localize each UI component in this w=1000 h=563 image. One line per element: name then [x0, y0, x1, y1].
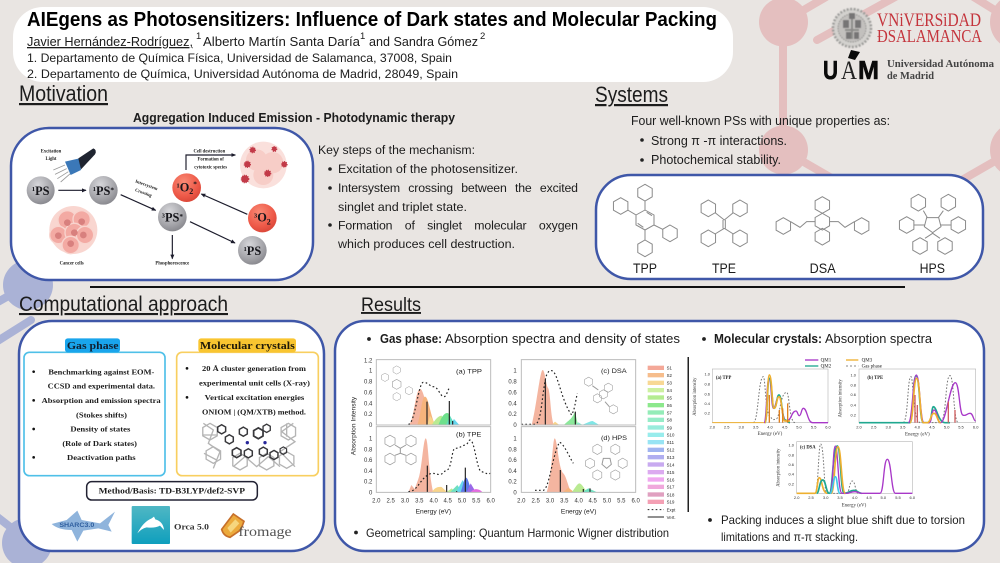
- axis ticks: 0.4: [508, 469, 517, 475]
- axis ticks: 0.2: [364, 412, 373, 418]
- authors: Alberto Martín Santa Daría: [203, 34, 361, 49]
- legend: S8: [667, 418, 673, 423]
- label: cancer cells: Cancer cells: [60, 261, 84, 266]
- label: intersystem crossing: [134, 179, 158, 199]
- title block: [13, 7, 733, 82]
- list: gas phase: Deactivation paths: [67, 454, 136, 462]
- axis ticks: 1: [369, 369, 373, 375]
- panel c: DSA crystal: [797, 442, 912, 493]
- logo: SHARC: SHARC3.0: [59, 522, 95, 529]
- axis ticks: 0.8: [508, 380, 517, 386]
- species: 1PS ground: [238, 236, 267, 265]
- species: 3PS*: PS: [165, 211, 179, 225]
- species: 1PS: 1: [32, 186, 35, 193]
- legend: S10: [667, 433, 675, 438]
- panel: mechanism diagram: [11, 128, 313, 280]
- species: 1PS ground: 1: [243, 246, 247, 253]
- list: crystals: experimental unit cells (X-ray): [199, 380, 311, 388]
- card: molecular crystals: Molecular crystals: [200, 341, 295, 352]
- axis ticks: 0: [513, 423, 517, 429]
- chart ticks and axis labels: 3.5: [900, 424, 906, 429]
- axis ticks: 3.0: [401, 498, 410, 504]
- chart ticks and axis labels: 0.8: [704, 382, 711, 387]
- chart ticks and axis labels: 3.5: [837, 495, 844, 500]
- text block: key steps: Formation of singlet molecular oxygen: [338, 218, 578, 232]
- chart ticks and axis labels: 0.4: [850, 402, 857, 407]
- heading: crystal results: [702, 332, 932, 346]
- axis ticks: 0.2: [508, 412, 517, 418]
- chart ticks and axis labels: 0.2: [788, 481, 795, 486]
- chart ticks and axis labels: 2.0: [794, 495, 800, 500]
- title: AIEgens as Photosensitizers: Influence of Dark states and Molecular Packing: [27, 9, 717, 31]
- panel a: TPP crystal: [712, 369, 828, 423]
- axis ticks: 4.5: [589, 498, 597, 504]
- label: intersystem crossing: Crossing: [134, 188, 153, 199]
- icon: destroyed cells: [240, 142, 287, 188]
- legend: [648, 366, 676, 520]
- heading: Systems: Systems: [595, 82, 668, 107]
- labels: system names: TPP: [633, 260, 657, 276]
- text block: key steps: [318, 143, 578, 251]
- panel d: HPS: [535, 435, 627, 492]
- axis ticks: 3.5: [560, 498, 569, 504]
- chart ticks and axis labels: 5.5: [958, 424, 965, 429]
- label: Orca 5.0: Orca 5.0: [174, 522, 209, 531]
- species: 1PS ground: PS: [247, 244, 261, 258]
- authors: [27, 31, 485, 49]
- panel b: TPE: (b) TPE: [456, 432, 481, 439]
- chart ticks and axis labels: 4.0: [767, 424, 774, 429]
- axis ticks: 0: [369, 423, 373, 429]
- axis ticks: 2.5: [532, 498, 540, 504]
- axis ticks: 1: [513, 437, 517, 443]
- decorative blue molecule: [0, 260, 53, 563]
- authors: and Sandra Gómez: [369, 34, 478, 49]
- chart ticks and axis labels: 5.0: [881, 495, 887, 500]
- text block: key steps: which produces cell destruction.: [337, 237, 515, 251]
- legend: S14: [667, 462, 675, 467]
- species: 1O2*: 2: [189, 187, 193, 196]
- species: 1O2*: *: [193, 180, 197, 189]
- legend: S4: [667, 388, 673, 393]
- legend: S15: [667, 470, 675, 475]
- axis ticks: 6.0: [631, 498, 640, 504]
- species: 1PS: [27, 176, 55, 204]
- species: 3PS*: *: [179, 212, 183, 221]
- axis ticks: 0.4: [508, 401, 517, 407]
- species: 3PS*: [158, 203, 187, 231]
- chart ticks and axis labels: Energy (eV): [758, 432, 783, 437]
- legend: S17: [667, 485, 675, 490]
- heading: crystal results: Molecular crystals:: [714, 332, 822, 346]
- list: gas phase: (Role of Dark states): [62, 440, 138, 448]
- heading: Results: Results: [361, 295, 421, 316]
- molecule: DSA: [776, 197, 869, 245]
- axis ticks: 0.2: [508, 480, 517, 486]
- axis ticks: 5.0: [603, 498, 612, 504]
- logo: UAM: A: [841, 56, 857, 85]
- panel b: TPE crystal: [859, 369, 976, 423]
- chart ticks and axis labels: 2.5: [808, 495, 815, 500]
- chart ticks and axis labels: Absorption intensity: [839, 379, 844, 417]
- list: crystals: 20 Å cluster generation from: [202, 365, 306, 373]
- label: cell destruction: Cell destruction: [193, 150, 226, 155]
- list: gas phase: Density of states: [70, 426, 131, 434]
- label: intersystem crossing: Intersystem: [134, 179, 158, 192]
- axis ticks: 0: [369, 490, 373, 496]
- legend: S19: [667, 500, 675, 505]
- chart ticks and axis labels: 4.5: [782, 424, 788, 429]
- species: 1O2*: 1: [176, 182, 180, 189]
- logo: Orca: [132, 506, 170, 544]
- label: cell destruction: [193, 150, 227, 171]
- axis ticks: 2.0: [517, 498, 526, 504]
- axis ticks: 3.5: [415, 498, 424, 504]
- chart ticks and axis labels: 2.5: [724, 424, 730, 429]
- axis ticks: 0.6: [508, 458, 517, 464]
- chart ticks and axis labels: 5.0: [944, 424, 950, 429]
- molecule: HPS: [899, 194, 966, 254]
- logo: SHARC: [52, 511, 115, 542]
- panel c: DSA: [521, 368, 628, 425]
- axis ticks: [364, 359, 640, 504]
- chart ticks and axis labels: 0.4: [788, 472, 795, 477]
- icon: cancer cells: [49, 206, 97, 254]
- logo: UAM: de Madrid: [887, 71, 934, 82]
- species: 1O2*: [172, 173, 201, 202]
- axis titles: Energy (eV): [416, 508, 451, 515]
- label: cell destruction: Formation of: [198, 158, 224, 163]
- list: gas phase: (Stokes shifts): [76, 411, 128, 419]
- species: 1PS*: PS: [96, 184, 110, 198]
- panel: systems: [596, 175, 983, 279]
- list: gas phase: Benchmarking against EOM-: [48, 368, 155, 376]
- labels: system names: TPE: [712, 260, 736, 276]
- panel c: DSA crystal: (c) DSA: [800, 446, 816, 451]
- axis ticks: 0.2: [364, 480, 373, 486]
- legend: S1: [667, 366, 673, 371]
- axis ticks: 0.8: [364, 380, 373, 386]
- card: molecular crystals: [177, 338, 318, 476]
- card: gas phase: [24, 338, 165, 476]
- chart ticks and axis labels: 2.0: [710, 424, 716, 429]
- label: excitation light: Light: [46, 157, 57, 162]
- chart ticks and axis labels: 0.8: [788, 453, 795, 458]
- axis ticks: 2.0: [372, 498, 381, 504]
- axis ticks: 5.5: [472, 498, 481, 504]
- chart ticks and axis labels: 4.0: [852, 495, 858, 500]
- axis ticks: 0.8: [508, 447, 517, 453]
- logo: UAM: U: [823, 55, 838, 85]
- method box: [87, 482, 257, 500]
- axis ticks: 5.5: [617, 498, 626, 504]
- axis ticks: 4.0: [430, 498, 438, 504]
- heading: crystal results: Absorption spectra: [825, 332, 932, 346]
- species: 3O2: 3: [254, 213, 258, 220]
- species: 1PS: PS: [35, 184, 50, 198]
- molecule: TPP: [613, 184, 677, 257]
- text block: key steps: Intersystem crossing between the excited: [338, 181, 578, 195]
- axis ticks: 0.4: [364, 469, 373, 475]
- logo: UAM: [823, 50, 995, 85]
- chart ticks and axis labels: 0.8: [850, 383, 857, 388]
- chart ticks and axis labels: 4.0: [915, 424, 921, 429]
- method box: Method/Basis: TD-B3LYP/def2-SVP: [99, 487, 245, 496]
- image: crystal cluster: [203, 423, 296, 470]
- chart ticks and axis labels: 2.0: [856, 424, 863, 429]
- chart legend: [805, 359, 883, 370]
- authors: 1: [196, 31, 201, 42]
- chart ticks and axis labels: Absorption intensity: [693, 377, 698, 416]
- chart ticks and axis labels: 3.0: [823, 495, 829, 500]
- legend: Expt: [667, 508, 676, 513]
- axis ticks: 6.0: [487, 498, 495, 504]
- chart ticks and axis labels: 4.5: [929, 424, 936, 429]
- chart: crystal absorption spectra: [693, 359, 979, 508]
- axis titles: Absorption Intensity: [351, 396, 358, 455]
- axis ticks: 5.0: [458, 498, 467, 504]
- affiliations: [27, 51, 458, 81]
- affiliations: 2. Departamento de Química, Universidad Autónoma de Madrid, 28049, Spain: [27, 67, 458, 81]
- axis ticks: 0.6: [508, 390, 517, 396]
- species: 3O2: 2: [267, 217, 271, 226]
- panel b: TPE crystal: (b) TPE: [867, 376, 883, 381]
- chart ticks and axis labels: 3.0: [739, 424, 745, 429]
- chart ticks and axis labels: Energy (eV): [842, 503, 867, 508]
- chart ticks and axis labels: 0.6: [704, 391, 711, 396]
- chart ticks and axis labels: 0.6: [850, 392, 857, 397]
- axis ticks: 1: [369, 437, 373, 443]
- label: excitation light: [41, 149, 62, 162]
- list: gas phase: CCSD and experimental data.: [48, 383, 155, 391]
- axis ticks: 4.5: [444, 498, 452, 504]
- panel a: TPP: [381, 366, 482, 425]
- species: 1PS*: 1: [93, 186, 96, 193]
- chart: gas-phase absorption spectra: [351, 359, 676, 520]
- text block: systems intro: Strong π -π interactions.: [651, 133, 787, 148]
- species: 1O2*: O: [180, 180, 189, 194]
- list: gas phase: Absorption and emission spectra: [42, 397, 161, 405]
- molecule: TPE: [701, 200, 747, 247]
- text block: key steps: singlet and triplet state.: [338, 200, 467, 214]
- logo: fromage: fromage: [238, 524, 292, 539]
- heading: Computational approach: Computational approach: [19, 293, 228, 316]
- axis ticks: 0: [513, 490, 517, 496]
- labels: system names: [633, 260, 945, 276]
- authors: 1: [360, 31, 365, 42]
- axis titles: Energy (eV): [561, 508, 596, 515]
- labels: system names: DSA: [810, 260, 836, 276]
- legend: S6: [667, 403, 673, 408]
- legend: S13: [667, 455, 675, 460]
- panel: computational approach: [19, 321, 324, 551]
- text block: systems intro: [631, 113, 890, 167]
- axis ticks: 0.4: [364, 401, 373, 407]
- chart ticks and axis labels: 6.0: [973, 424, 979, 429]
- chart ticks and axis labels: 5.5: [895, 495, 902, 500]
- chart ticks and axis labels: Energy (eV): [905, 433, 930, 438]
- panel a: TPP crystal: (a) TPP: [716, 376, 731, 381]
- legend: S16: [667, 477, 675, 482]
- authors: Javier Hernández-Rodríguez,: [27, 34, 193, 49]
- axis ticks: 0.6: [364, 390, 373, 396]
- legend: S3: [667, 381, 673, 386]
- text block: key steps: Key steps of the mechanism:: [318, 143, 475, 157]
- chart ticks and axis labels: Absorption intensity: [776, 448, 781, 487]
- affiliations: 1. Departamento de Química Física, Universidad de Salamanca, 37008, Spain: [27, 51, 452, 65]
- chart ticks and axis labels: 2.5: [871, 424, 877, 429]
- chart ticks and axis labels: 1.0: [850, 373, 857, 378]
- panel c: DSA: (c) DSA: [601, 368, 628, 375]
- chart ticks and axis labels: 4.5: [866, 495, 873, 500]
- logo: UAM: M: [858, 55, 879, 85]
- axis ticks: 3.0: [546, 498, 555, 504]
- chart ticks and axis labels: 0.2: [850, 412, 857, 417]
- chart ticks and axis labels: 3.5: [753, 424, 759, 429]
- chart ticks and axis labels: 5.0: [796, 424, 803, 429]
- panel d: HPS: (d) HPS: [601, 435, 627, 442]
- panel a: TPP: (a) TPP: [456, 368, 482, 375]
- axis ticks: 0.6: [364, 458, 373, 464]
- heading: gas phase results: Absorption spectra and density of states: [445, 332, 680, 346]
- note: packing conclusion: [708, 513, 965, 544]
- label: cell destruction: cytotoxic species: [194, 166, 227, 171]
- legend: S7: [667, 410, 673, 415]
- axis titles: [351, 396, 596, 515]
- chart ticks and axis labels: 0.6: [788, 462, 795, 467]
- heading: gas phase results: Gas phase:: [380, 332, 442, 346]
- chart ticks and axis labels: 6.0: [825, 424, 832, 429]
- logo: fromage: [222, 514, 292, 539]
- note: sampling: Geometrical sampling: Quantum Harmonic Wigner distribution: [366, 526, 669, 540]
- label: excitation light: Excitation: [41, 149, 62, 154]
- heading: Motivation: Motivation: [19, 81, 108, 106]
- panel: results: [335, 321, 984, 551]
- chart ticks and axis labels: 0.2: [704, 411, 711, 416]
- text block: systems intro: Four well-known PSs with unique properties as:: [631, 113, 890, 128]
- authors: 2: [480, 31, 485, 42]
- chart ticks and axis labels: 6.0: [910, 495, 916, 500]
- chart ticks and axis labels: 1.0: [704, 372, 711, 377]
- chart ticks and axis labels: [693, 372, 979, 508]
- chart ticks and axis labels: 0.4: [704, 401, 711, 406]
- legend: S2: [667, 373, 673, 378]
- card: gas phase: Gas phase: [67, 341, 119, 352]
- species: 3O2: O: [257, 211, 267, 225]
- list: crystals: [186, 365, 311, 416]
- chart legend: QM2: [821, 365, 832, 370]
- chart legend: Gas phase: [862, 365, 883, 370]
- note: packing conclusion: limitations and π-π stacking.: [721, 530, 858, 544]
- list: crystals: ONIOM | (QM/XTB) method.: [202, 408, 306, 416]
- species: 3O2: [248, 204, 277, 232]
- legend: S11: [667, 440, 675, 445]
- icon: flashlight: [53, 148, 96, 182]
- legend: S9: [667, 425, 673, 430]
- chart legend: QM1: [821, 359, 832, 364]
- text block: systems intro: Photochemical stability.: [651, 152, 781, 167]
- label: phosphorescence: Phosphorescence: [155, 262, 189, 267]
- axis ticks: 4.0: [575, 498, 583, 504]
- arrows: [58, 155, 247, 259]
- chart ticks and axis labels: 3.0: [886, 424, 892, 429]
- logo: Universidad de Salamanca: [833, 9, 982, 47]
- labels: system names: HPS: [920, 260, 945, 276]
- decorative pink molecule: [759, 0, 1000, 180]
- logo: UAM: Universidad Autónoma: [887, 59, 995, 70]
- legend: S12: [667, 448, 675, 453]
- axis ticks: 1.2: [364, 359, 373, 365]
- list: gas phase: [32, 368, 161, 462]
- legend: S18: [667, 492, 675, 497]
- axis ticks: 2.5: [387, 498, 395, 504]
- axis ticks: 1: [513, 369, 517, 375]
- axis ticks: 0.8: [364, 447, 373, 453]
- legend: S5: [667, 395, 673, 400]
- list: crystals: Vertical excitation energies: [205, 394, 305, 402]
- subheading: AIE PDT: Aggregation Induced Emission - Photodynamic therapy: [133, 111, 455, 125]
- species: 1PS*: *: [110, 185, 114, 194]
- chart ticks and axis labels: 5.5: [811, 424, 817, 429]
- species: 3PS*: 3: [162, 213, 166, 220]
- chart legend: QM3: [862, 359, 873, 364]
- note: packing conclusion: Packing induces a slight blue shift due to torsion: [721, 513, 965, 527]
- chart ticks and axis labels: 1.0: [788, 442, 795, 447]
- species: 1PS*: [89, 176, 118, 205]
- text block: key steps: Excitation of the photosensitizer.: [338, 162, 518, 176]
- panel b: TPE: [385, 432, 491, 492]
- legend: Vert.: [667, 515, 676, 520]
